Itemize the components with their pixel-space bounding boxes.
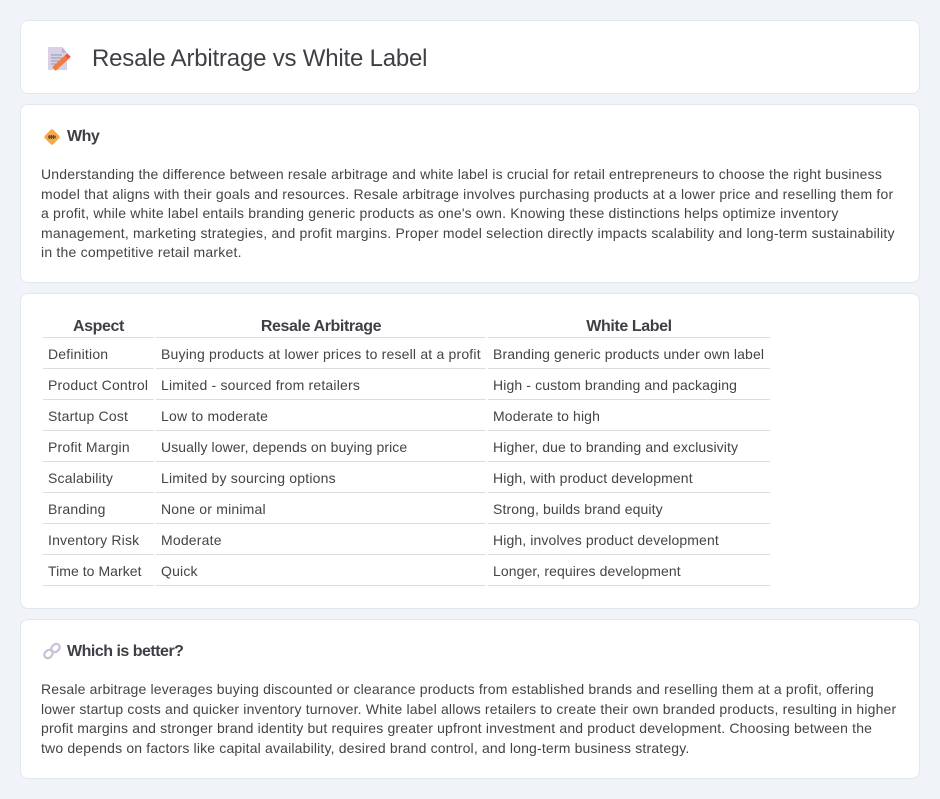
comparison table: Low to moderate [161, 408, 268, 424]
comparison table: Moderate to high [493, 408, 600, 424]
comparison table: Limited - sourced from retailers [161, 377, 360, 393]
heading: which is better: Which is better? [67, 643, 183, 660]
comparison table: Inventory Risk [48, 532, 139, 548]
comparison table: Strong, builds brand equity [493, 501, 663, 517]
panel: why [20, 104, 920, 283]
comparison table: Resale Arbitrage [261, 318, 381, 334]
comparison table: Limited by sourcing options [161, 470, 336, 486]
panel: header [20, 20, 920, 94]
comparison table: Product Control [48, 377, 148, 393]
text: why paragraph: in the competitive retail market. [41, 244, 242, 260]
comparison table: High, involves product development [493, 532, 719, 548]
comparison table: Startup Cost [48, 408, 128, 424]
comparison table: High - custom branding and packaging [493, 377, 737, 393]
icon: warning diamond [44, 129, 60, 145]
panel: which is better [20, 619, 920, 779]
comparison table: Branding generic products under own label [493, 346, 764, 362]
text: why paragraph: Understanding the difference between resale arbitrage and white label is crucial for retail entrepreneurs to choose the right business [41, 166, 882, 182]
text: which is better paragraph: lower startup costs and quicker inventory turnover. White label allows retailers to create their own branded products, resulting in higher [41, 701, 896, 717]
comparison table: Profit Margin [48, 439, 130, 455]
text: which is better paragraph: two depends on factors like capital availability, desired brand control, and long-term business strategy. [41, 740, 689, 756]
text: which is better paragraph: profit margins and stronger brand identity but requires greater upfront investment and product development. Choosing between the [41, 720, 872, 736]
comparison table: Branding [48, 501, 106, 517]
comparison table: None or minimal [161, 501, 266, 517]
text: why paragraph: model that aligns with their goals and resources. Resale arbitrage involves purchasing products at a lower price and reselling them for [41, 186, 893, 202]
comparison table [43, 318, 770, 586]
comparison table: Aspect [73, 318, 124, 334]
comparison table: Buying products at lower prices to resell at a profit [161, 346, 481, 362]
comparison table: Longer, requires development [493, 563, 681, 579]
text: why paragraph [41, 166, 895, 260]
comparison table: Time to Market [48, 563, 142, 579]
comparison table: Definition [48, 346, 108, 362]
comparison table: Higher, due to branding and exclusivity [493, 439, 738, 455]
text: which is better paragraph: Resale arbitrage leverages buying discounted or clearance products from established brands and reselling them at a profit, offering [41, 681, 874, 697]
comparison table: Moderate [161, 532, 222, 548]
panel: comparison table card [20, 293, 920, 609]
icon: document with pencil [48, 47, 71, 71]
heading: why: Why [67, 128, 99, 145]
text: why paragraph: a profit, while white label entails branding generic products as one's own. Knowing these distinctions helps optimize inventory [41, 205, 839, 221]
comparison table: High, with product development [493, 470, 693, 486]
comparison table: Quick [161, 563, 198, 579]
icon: link [43, 642, 61, 660]
comparison table: White Label [586, 318, 672, 334]
text: which is better paragraph [41, 681, 896, 756]
text: why paragraph: management, marketing strategies, and profit margins. Proper model selection directly impacts scalability and long-term sustainability [41, 225, 895, 241]
comparison table: Scalability [48, 470, 113, 486]
title: Resale Arbitrage vs White Label [92, 45, 427, 72]
comparison table: Usually lower, depends on buying price [161, 439, 407, 455]
